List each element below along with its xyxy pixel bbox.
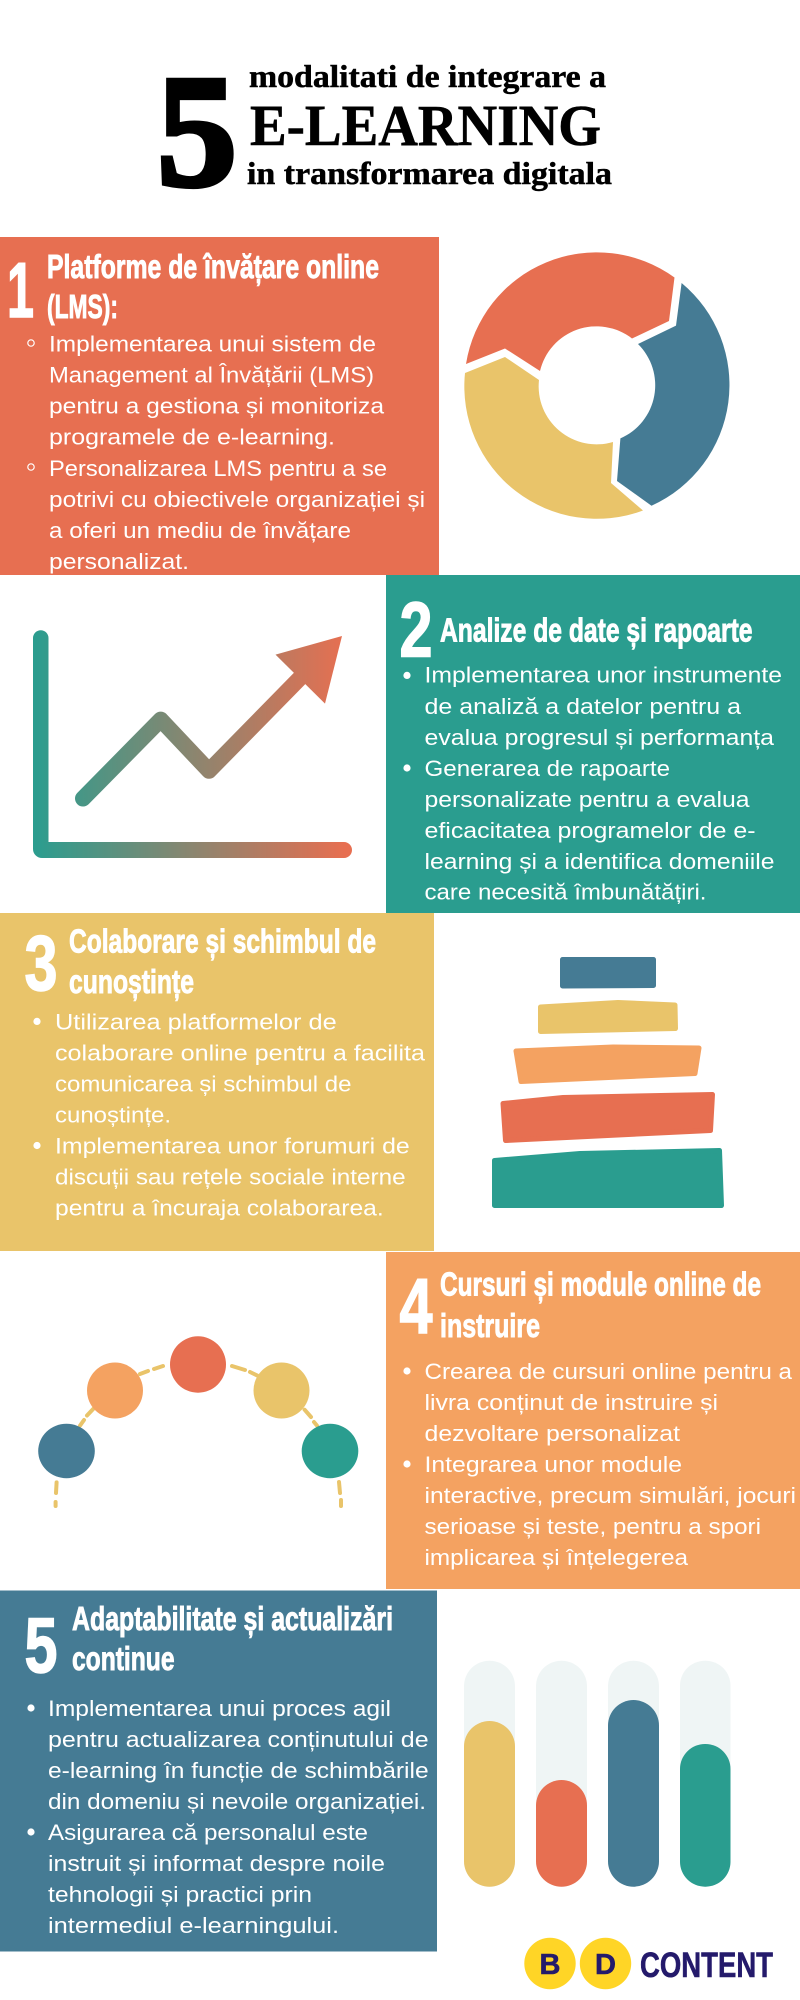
panel 3 heading [69, 922, 376, 1001]
panel 3 number: 3 [24, 919, 58, 1007]
panel 4 bullets [403, 1359, 796, 1570]
panel 1 bullets: Management al Învățării (LMS) [49, 362, 374, 388]
logo: BD Content: B [540, 1949, 560, 1981]
dot orange [87, 1362, 143, 1418]
dot yellow [254, 1362, 310, 1418]
dot coral [170, 1336, 226, 1393]
panel 1 heading: Platforme de învățare online [47, 248, 379, 286]
panel 4 bullets: interactive, precum simulări, jocuri [424, 1483, 796, 1508]
panel 2 bullets: Implementarea unor instrumente [424, 663, 782, 688]
panel 2 bullets: personalizate pentru a evalua [424, 787, 750, 812]
dot teal [302, 1424, 358, 1478]
panel 5 background [0, 1590, 437, 1952]
panel 4 bullets: implicarea și înțelegerea [424, 1545, 689, 1570]
bar 4 [680, 1661, 730, 1887]
panel 1 bullets: pentru a gestiona și monitoriza [49, 394, 385, 419]
panel 1 bullets: Personalizarea LMS pentru a se [49, 456, 387, 481]
panel 5 bullets: e-learning în funcție de schimbările [48, 1758, 429, 1783]
dot blue [38, 1424, 95, 1478]
panel 4 heading: instruire [440, 1307, 540, 1344]
panel 3 bullets: Implementarea unor forumuri de [55, 1134, 410, 1159]
panel 1 bullets: programele de e-learning. [49, 425, 335, 450]
panel 5 bullets: pentru actualizarea conținutului de [48, 1727, 429, 1752]
panel 2 number: 2 [400, 586, 432, 674]
title line 2: E-LEARNING [250, 93, 601, 158]
panel 5 bullets: instruit și informat despre noile [48, 1851, 385, 1876]
panel 4 bullets: Integrarea unor module [424, 1452, 682, 1477]
icon: vertical progress bars [464, 1661, 730, 1887]
panel 2 bullets: learning și a identifica domeniile [424, 849, 774, 874]
dashed connectors [56, 1366, 341, 1506]
panel 3 bullets: Utilizarea platformelor de [55, 1010, 337, 1035]
panel 4: online courses [386, 1252, 800, 1589]
panel 3 heading: Colaborare și schimbul de [69, 922, 376, 960]
bar 3 [608, 1661, 659, 1887]
title line 3: in transformarea digitala [247, 155, 612, 191]
panel 3 heading: cunoștințe [69, 963, 194, 1001]
panel 1 number: 1 [7, 246, 34, 334]
panel 2 bullets: de analiză a datelor pentru a [424, 694, 742, 719]
panel 3: collaboration [0, 913, 434, 1251]
panel 4 number: 4 [400, 1262, 432, 1350]
panel 2 bullets: eficacitatea programelor de e- [424, 818, 756, 843]
panel 3 bullets: pentru a încuraja colaborarea. [55, 1196, 384, 1221]
panel 1 bullets: Implementarea unui sistem de [49, 332, 376, 356]
panel 4 background [386, 1252, 800, 1589]
line chart with rising arrow [33, 630, 352, 858]
panel 1 heading [47, 248, 379, 325]
panel 3 bullets: colaborare online pentru a facilita [55, 1040, 426, 1066]
panel 4 bullets: livra conținut de instruire și [424, 1390, 718, 1415]
panel 2 bullets: evalua progresul și performanța [424, 725, 775, 750]
panel 5 bullets: intermediul e-learningului. [48, 1913, 339, 1938]
panel 3 bullets: comunicarea și schimbul de [55, 1072, 352, 1097]
chart arrow head [276, 636, 342, 704]
panel 1: LMS platforms [0, 237, 439, 575]
panel 5 heading [72, 1600, 393, 1677]
panel 5 number: 5 [24, 1601, 58, 1689]
big numeral 5: 5 [157, 42, 237, 220]
panel 4 bullets: Crearea de cursuri online pentru a [424, 1359, 793, 1384]
title [157, 42, 612, 220]
panel 5 bullets: Implementarea unui proces agil [48, 1696, 391, 1721]
panel 3 background [0, 913, 434, 1251]
panel 1 background [0, 237, 439, 575]
panel 5 bullets: din domeniu și nevoile organizației. [48, 1789, 426, 1814]
panel 2 bullets: care necesită îmbunătățiri. [424, 880, 706, 905]
bar 1 [464, 1661, 515, 1887]
panel 5 bullets [27, 1696, 429, 1938]
panel 3 bullets: cunoștințe. [55, 1102, 171, 1128]
panel 1 bullets: personalizat. [49, 549, 189, 574]
chart trend line [83, 676, 302, 798]
panel 5 bullets: tehnologii și practici prin [48, 1882, 312, 1907]
panel 1 heading: (LMS): [47, 288, 118, 325]
panel 3 bullets: discuții sau rețele sociale interne [55, 1164, 406, 1190]
logo: BD Content: D [595, 1949, 616, 1981]
icon: circular arrows donut [464, 252, 729, 519]
panel 1 bullets [28, 332, 425, 574]
title line 1: modalitati de integrare a [249, 58, 606, 94]
panel 1 bullets: potrivi cu obiectivele organizației și [49, 487, 425, 512]
logo: BD Content [524, 1938, 773, 1989]
panel 2: data analysis [386, 575, 800, 913]
panel 5: adaptability [0, 1590, 437, 1952]
panel 1 bullets: a oferi un mediu de învățare [49, 518, 351, 543]
panel 5 bullets: Asigurarea că personalul este [48, 1820, 368, 1845]
panel 4 heading [440, 1266, 761, 1344]
panel 4 bullets: serioase și teste, pentru a spori [424, 1514, 761, 1539]
panel 5 heading: continue [72, 1640, 174, 1677]
panel 2 bullets [403, 663, 782, 905]
panel 2 background [386, 575, 800, 913]
bar 2 [536, 1661, 587, 1887]
panel 3 bullets [33, 1010, 426, 1221]
icon: arc of five coloured dots [38, 1336, 358, 1506]
chart axes [33, 630, 352, 858]
panel 5 heading: Adaptabilitate și actualizări [72, 1600, 393, 1638]
icon: stacked pyramid of layers [494, 960, 722, 1206]
panel 4 bullets: dezvoltare personalizat [424, 1421, 681, 1446]
panel 2 bullets: Generarea de rapoarte [424, 756, 670, 781]
